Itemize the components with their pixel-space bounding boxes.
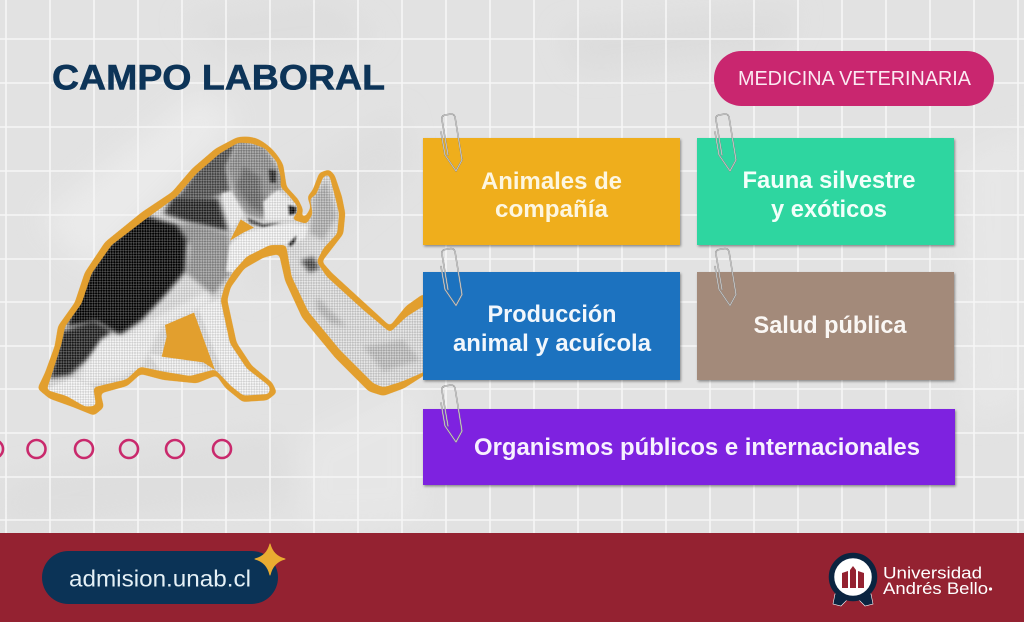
website pill: admision.unab.cl [69, 566, 251, 592]
card: fauna silvestre y exóticos: y exóticos [771, 196, 887, 223]
card: organismos públicos e internacionales: Organismos públicos e internacionales [474, 434, 920, 461]
card: producción animal y acuícola: Producción [488, 301, 616, 328]
paper clips [441, 114, 736, 442]
card: fauna silvestre y exóticos [697, 138, 954, 245]
orange outline [37, 136, 425, 416]
footer band [0, 533, 1024, 622]
card: salud pública [697, 272, 954, 380]
decorative circles row [0, 440, 231, 458]
raised paw leg [226, 223, 308, 273]
dog and arm fill [48, 142, 423, 406]
illustration: dog high-five with human arm [38, 136, 423, 415]
logo: universidad andrés bello: Andrés Bello [883, 579, 988, 598]
card: animales de compañía [423, 138, 680, 245]
website pill [42, 551, 278, 604]
rear light patches [78, 292, 212, 385]
badge: medicina veterinaria: MEDICINA VETERINARIA [738, 68, 972, 90]
neck and shoulder [163, 197, 228, 232]
head shading [177, 140, 238, 198]
rear dark patch [50, 320, 112, 378]
card: organismos públicos e internacionales [423, 409, 955, 485]
hand and arm shading [310, 180, 337, 240]
card: animales de compañía: compañía [495, 196, 609, 223]
card: producción animal y acuícola: animal y acuícola [453, 330, 652, 357]
title: CAMPO LABORAL [52, 58, 385, 98]
black saddle [67, 215, 187, 335]
badge: medicina veterinaria [714, 51, 994, 106]
card: salud pública: Salud pública [754, 312, 907, 339]
card: animales de compañía: Animales de [481, 168, 622, 195]
icon: gold sparkle [255, 544, 285, 575]
logo: universidad andrés bello [832, 556, 992, 606]
logo: universidad andrés bello: Universidad [883, 564, 982, 582]
card: producción animal y acuícola [423, 272, 680, 380]
halftone overlay [48, 143, 423, 406]
card: fauna silvestre y exóticos: Fauna silvestre [742, 167, 916, 194]
